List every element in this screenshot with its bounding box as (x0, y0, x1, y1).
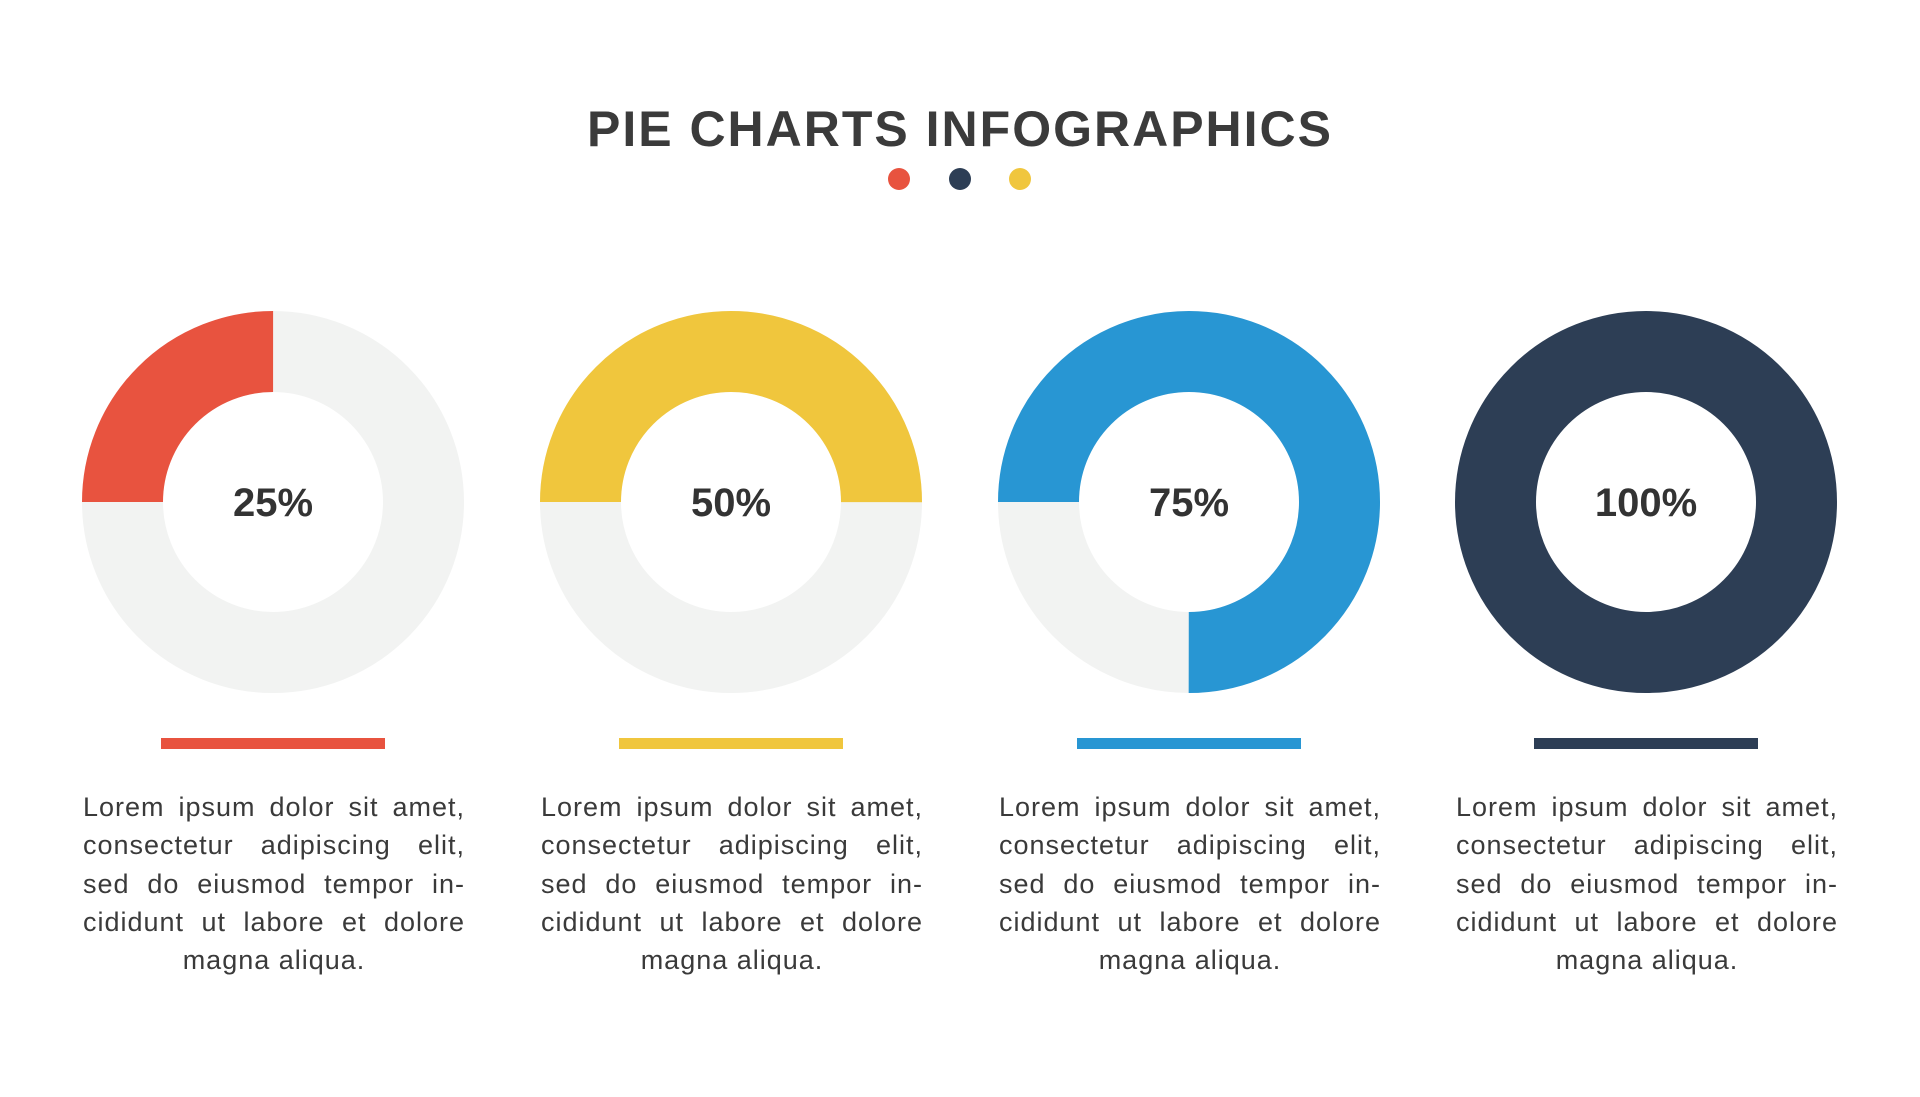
donut: 25%: 25% (233, 481, 313, 525)
donut: 100% (1496, 352, 1796, 652)
text 3: cididunt ut labore et dolore (999, 907, 1381, 937)
text 1: magna aliqua. (183, 945, 365, 975)
text 2: sed do eiusmod tempor in- (541, 869, 923, 899)
bar: red (161, 738, 385, 749)
text 1: consectetur adipiscing elit, (83, 830, 465, 860)
text 2: consectetur adipiscing elit, (541, 830, 923, 860)
text 1: Lorem ipsum dolor sit amet, (83, 792, 465, 822)
text 3: consectetur adipiscing elit, (999, 830, 1381, 860)
text 4: cididunt ut labore et dolore (1456, 907, 1838, 937)
bar: yellow (619, 738, 843, 749)
text 2 (541, 792, 923, 975)
bar: blue (1077, 738, 1301, 749)
text 1: cididunt ut labore et dolore (83, 907, 465, 937)
donut: 75%: 75% (1149, 481, 1229, 525)
donut: 75% (1038, 352, 1340, 652)
text 4: consectetur adipiscing elit, (1456, 830, 1838, 860)
text 4: Lorem ipsum dolor sit amet, (1456, 792, 1838, 822)
text 3: sed do eiusmod tempor in- (999, 869, 1381, 899)
text 1: sed do eiusmod tempor in- (83, 869, 465, 899)
text 4 (1456, 792, 1838, 975)
text 3: Lorem ipsum dolor sit amet, (999, 792, 1381, 822)
text 4: magna aliqua. (1556, 945, 1738, 975)
decorative dots (888, 168, 1031, 190)
text 3: magna aliqua. (1099, 945, 1281, 975)
text 3 (999, 792, 1381, 975)
text 4: sed do eiusmod tempor in- (1456, 869, 1838, 899)
text 2: magna aliqua. (641, 945, 823, 975)
donut: 25% (122, 352, 424, 652)
donut: 50%: 50% (691, 481, 771, 525)
title: PIE CHARTS INFOGRAPHICS (587, 101, 1333, 157)
donut: 50% (580, 352, 882, 652)
bar: navy (1534, 738, 1758, 749)
donut: 100%: 100% (1595, 481, 1697, 525)
text 2: cididunt ut labore et dolore (541, 907, 923, 937)
text 1 (83, 792, 465, 975)
text 2: Lorem ipsum dolor sit amet, (541, 792, 923, 822)
